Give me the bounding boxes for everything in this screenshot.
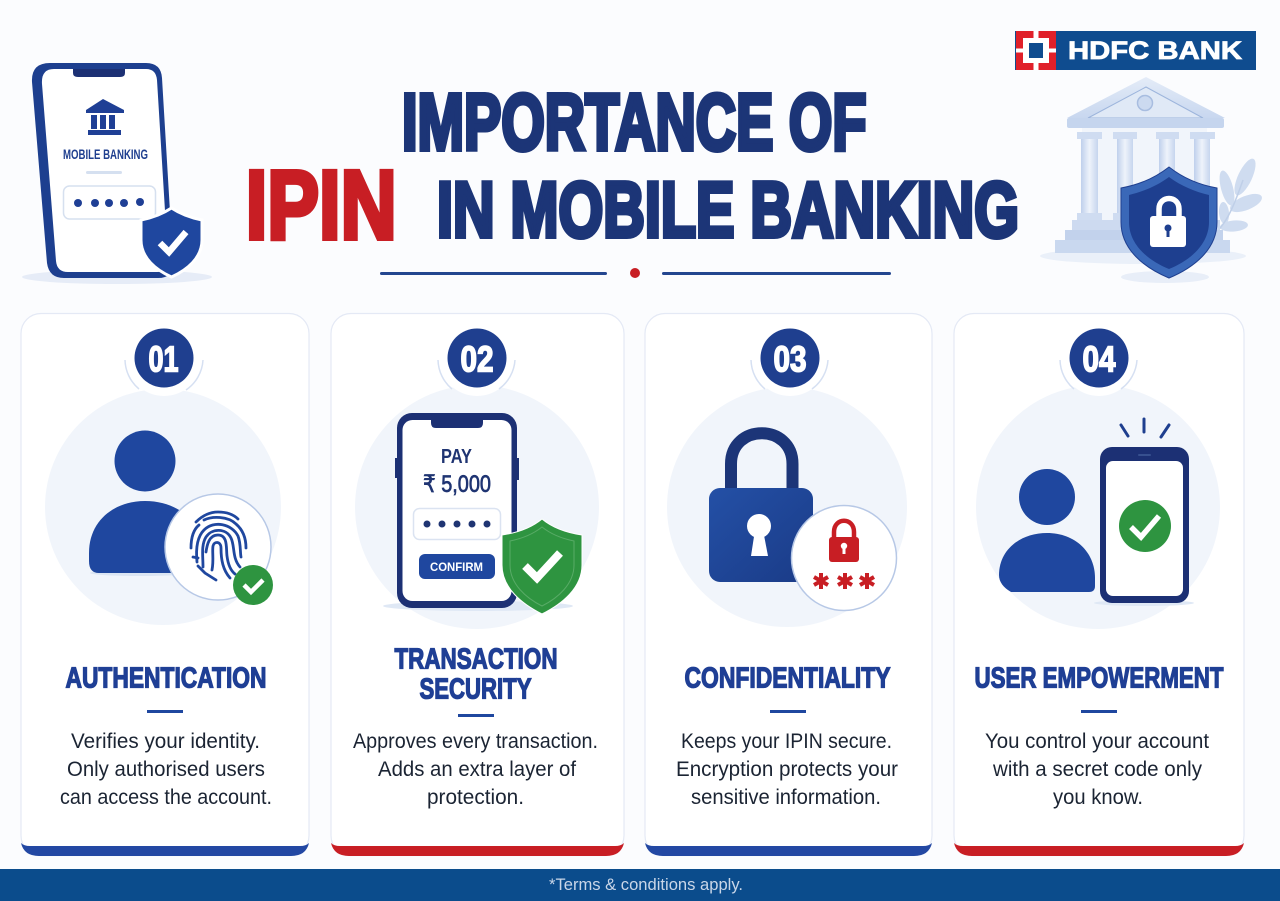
illustration background circle (45, 389, 281, 625)
number badge 02: 02 (460, 338, 494, 380)
description (60, 730, 272, 809)
illustration background circle (355, 385, 599, 629)
icon: payment phone: PAY (441, 446, 473, 468)
illustration: phone with mobile banking login (22, 63, 212, 284)
icon: shield with check (141, 208, 202, 277)
icon: padlock (709, 433, 813, 582)
description: you know. (1053, 786, 1143, 809)
icon: green shield (502, 519, 582, 614)
illustration: bank building with lock shield (1040, 77, 1264, 283)
icon: user (89, 430, 196, 576)
illustration background circle (976, 385, 1220, 629)
title (246, 78, 1019, 259)
title: IN MOBILE BANKING (437, 166, 1019, 254)
description: Verifies your identity. (71, 730, 260, 753)
number badge 04: 04 (1082, 338, 1116, 380)
illustration background circle (667, 387, 907, 627)
description (353, 730, 598, 809)
accent bar (21, 843, 309, 856)
number badge 01 (125, 320, 203, 396)
footer: *Terms & conditions apply. (549, 875, 743, 894)
number badge 01: 01 (148, 338, 178, 380)
description: Only authorised users (67, 758, 265, 781)
description: Approves every transaction. (353, 730, 598, 753)
panel: confidentiality (645, 314, 932, 856)
icon: payment phone (383, 413, 573, 611)
description: Keeps your IPIN secure. (681, 730, 892, 753)
description (985, 730, 1209, 809)
description: protection. (427, 786, 524, 809)
accent bar (331, 843, 624, 856)
icon: green check (233, 565, 273, 605)
number badge 03 (751, 320, 828, 396)
panel: transaction security (331, 314, 624, 856)
description: You control your account (985, 730, 1209, 753)
description: can access the account. (60, 786, 272, 809)
description: sensitive information. (691, 786, 881, 809)
description: with a secret code only (992, 758, 1202, 781)
label: mobile banking: MOBILE BANKING (63, 146, 148, 162)
heading: TRANSACTION (394, 644, 558, 676)
description (676, 730, 898, 809)
title divider (380, 268, 891, 278)
signal rays (1121, 419, 1169, 437)
icon: phone with check (1094, 419, 1194, 606)
accent bar (645, 843, 932, 856)
icon: secret code badge (792, 506, 896, 610)
description: Encryption protects your (676, 758, 898, 781)
panel: authentication (21, 314, 309, 856)
title: IPIN (246, 150, 397, 259)
accent bar (954, 843, 1244, 856)
icon: fingerprint badge (165, 494, 271, 600)
description: Adds an extra layer of (378, 758, 576, 781)
heading: SECURITY (420, 674, 532, 706)
icon: shield with padlock (1121, 167, 1217, 278)
icon: payment phone: CONFIRM (430, 560, 483, 574)
HDFC Bank logo (1015, 31, 1256, 70)
icon: bank on phone screen (86, 99, 124, 135)
number badge 04 (1060, 320, 1137, 396)
HDFC Bank logo: HDFC BANK (1068, 37, 1242, 65)
heading: CONFIDENTIALITY (684, 662, 890, 694)
number badge 03: 03 (774, 338, 806, 380)
heading (394, 644, 558, 706)
panel: user empowerment (954, 314, 1244, 856)
title: IMPORTANCE OF (402, 78, 866, 166)
footer (0, 869, 1280, 901)
leaves (1216, 156, 1264, 233)
PIN input field (64, 186, 156, 219)
number badge 02 (438, 320, 515, 396)
heading: AUTHENTICATION (66, 662, 266, 694)
icon: user (999, 469, 1095, 592)
icon: payment phone: ₹ 5,000 (423, 471, 491, 498)
